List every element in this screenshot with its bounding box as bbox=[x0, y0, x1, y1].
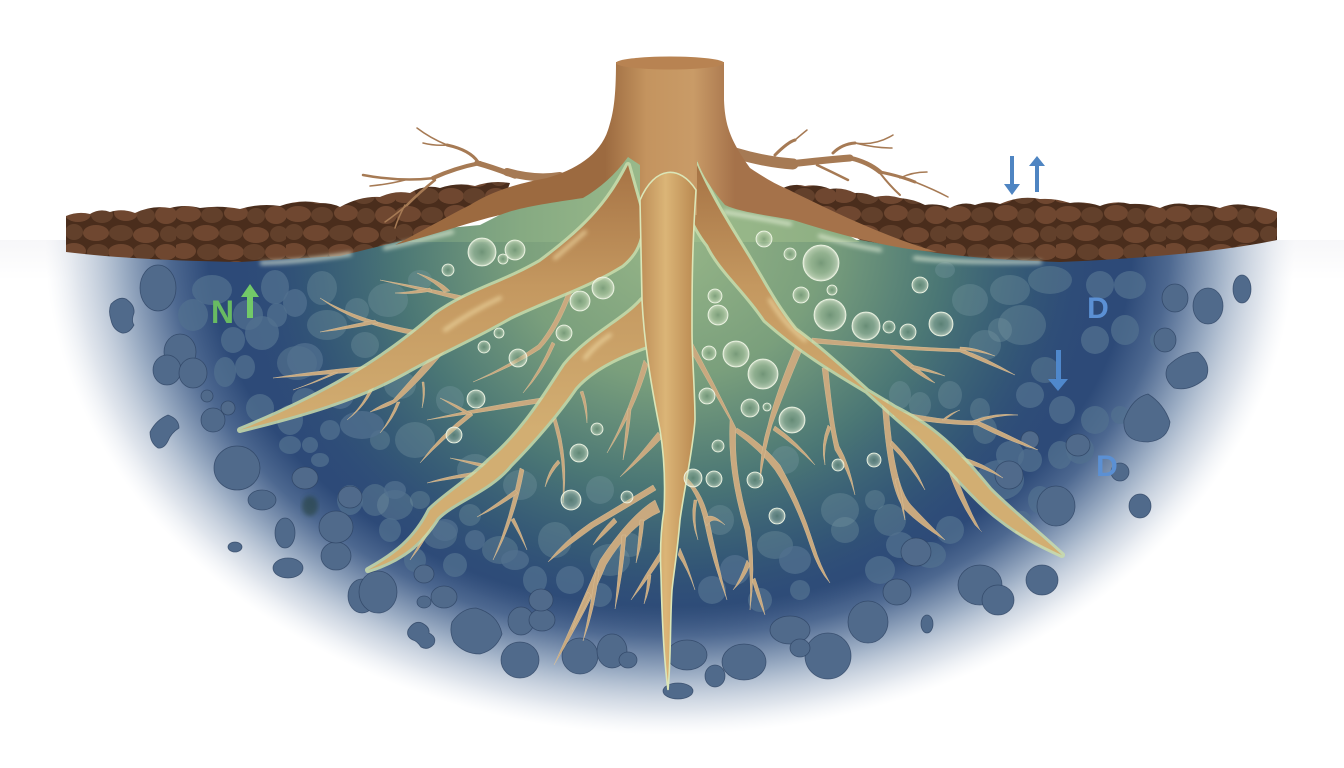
dark zone soil stones bbox=[178, 270, 1170, 612]
upper left branches bbox=[380, 280, 488, 306]
center right branches bbox=[680, 472, 727, 600]
right branches bbox=[812, 338, 1015, 375]
label: N with up arrow: N bbox=[211, 294, 234, 330]
exposed surface roots bbox=[363, 128, 948, 228]
arrow: down bbox=[1048, 350, 1068, 391]
left main root bbox=[240, 165, 642, 430]
arrows: down and up pair bbox=[1004, 156, 1045, 195]
translucent inner soil stones bbox=[277, 262, 1072, 576]
surface meniscus highlights bbox=[262, 212, 1040, 263]
pale ground below horizon bbox=[0, 240, 1344, 280]
middle left branches bbox=[473, 290, 572, 382]
root highlights bbox=[445, 232, 805, 358]
main roots with pale sheath bbox=[240, 165, 1062, 570]
label: D lower: D bbox=[1096, 450, 1118, 483]
outlined outer soil stones bbox=[110, 265, 1251, 699]
middle left root bbox=[368, 300, 650, 570]
fine root branches bbox=[273, 273, 1060, 665]
trunk top cap bbox=[616, 56, 724, 70]
green rhizosphere zone under soil bbox=[300, 150, 1000, 242]
near taproot left branches bbox=[607, 360, 648, 453]
soil halo background bbox=[58, 240, 1282, 726]
air bubbles bbox=[442, 231, 953, 524]
right main root bbox=[690, 165, 1062, 555]
tree trunk with surface root flares bbox=[395, 62, 937, 252]
label: D upper: D bbox=[1087, 292, 1109, 325]
topsoil layer bbox=[66, 182, 1277, 262]
label: N with up arrow bbox=[211, 284, 259, 330]
taproot bbox=[640, 172, 696, 690]
